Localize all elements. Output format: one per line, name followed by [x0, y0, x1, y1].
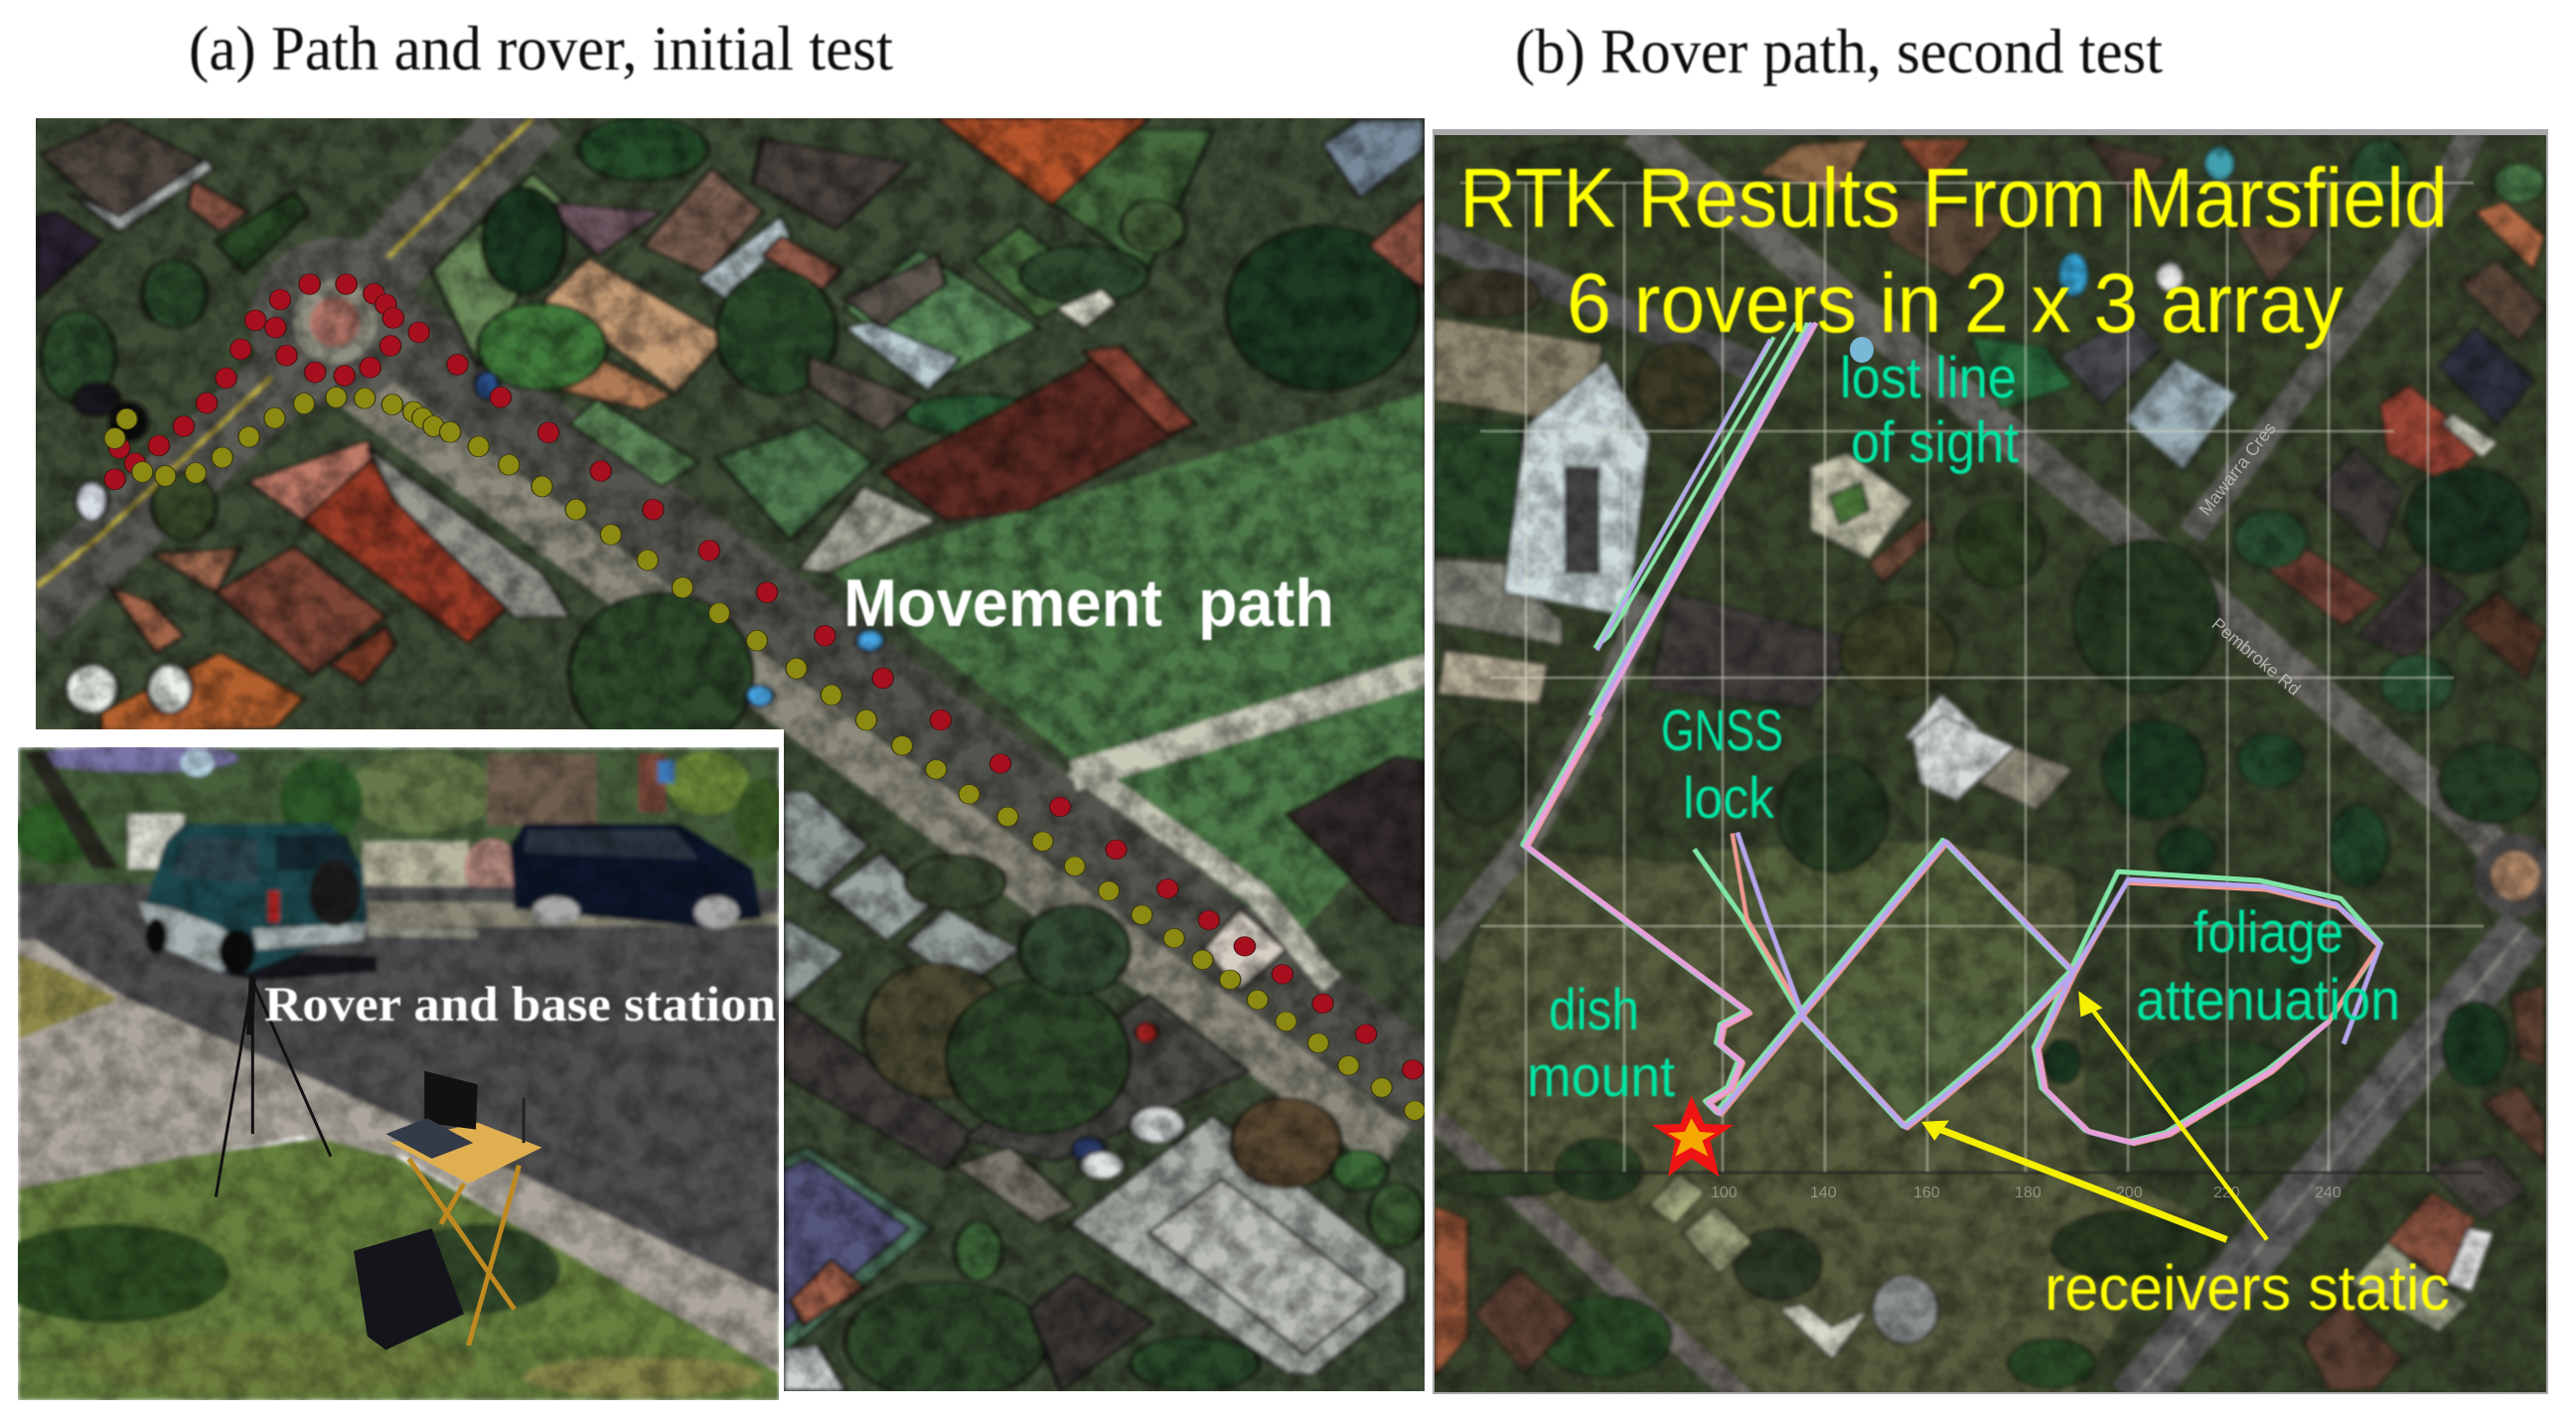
map axis and street labels: 220 — [2213, 1184, 2240, 1201]
rover tracks, lower section — [1523, 714, 2381, 1144]
title: panel a: (a) Path and rover, initial test — [189, 14, 893, 83]
label: movement path: Movement path — [843, 565, 1334, 641]
panel: RTK results aerial map — [1433, 129, 2557, 1401]
annotation: dish mount: mount — [1527, 1044, 1675, 1109]
annotation: foliage attenuation: foliage — [2194, 900, 2344, 965]
map axis and street labels: Mawarra Cres — [2195, 418, 2280, 519]
red and yellow rover path dots, second section — [891, 736, 1426, 1120]
arrow: receivers static to first point — [1921, 1121, 2226, 1240]
heading: 6 rovers: 6 rovers in 2 x 3 array — [1567, 256, 2344, 350]
panel: photo inset of rover and base station — [0, 729, 790, 1401]
map axis and street labels: Pembroke Rd — [2207, 614, 2305, 700]
annotation: foliage attenuation: attenuation — [2136, 968, 2400, 1032]
map axis and street labels: 200 — [2116, 1184, 2143, 1201]
annotation: dish mount — [1527, 978, 1675, 1109]
title: panel b: (b) Rover path, second test — [1515, 17, 2163, 86]
annotation: lost line of sight — [1840, 346, 2019, 475]
annotation: lost line of sight: lost line — [1840, 346, 2017, 410]
map axis and street labels: 140 — [1810, 1184, 1837, 1201]
annotation: dish mount: dish — [1549, 978, 1639, 1042]
map axis and street labels: 180 — [2015, 1184, 2042, 1201]
label: rover and base station: Rover and base station — [264, 976, 776, 1031]
icon: dish mount star — [1652, 1096, 1734, 1177]
tripod — [216, 977, 331, 1196]
annotation: GNSS lock: lock — [1683, 766, 1775, 831]
map axis and street labels: 240 — [2315, 1184, 2342, 1201]
folding table, laptop and bag — [354, 1071, 542, 1349]
icon: map pin — [1850, 337, 1874, 363]
map axis and street labels: 100 — [1711, 1184, 1738, 1201]
heading: RTK results: RTK Results From Marsfield — [1459, 151, 2448, 244]
annotation: lost line of sight: of sight — [1851, 410, 2019, 475]
red and yellow rover path dots, first section — [104, 274, 952, 730]
annotation: GNSS lock: GNSS — [1661, 699, 1783, 763]
rover tracks, upper section — [1590, 323, 1816, 715]
panel: aerial map of movement path — [30, 109, 1440, 1399]
map axis and street labels: 160 — [1913, 1184, 1940, 1201]
map grid — [1460, 183, 2484, 1173]
annotation: receivers static: receivers static — [2045, 1252, 2450, 1324]
annotation: foliage attenuation — [2136, 900, 2400, 1032]
annotation: GNSS lock — [1661, 699, 1783, 831]
arrow: receivers static to second point — [2078, 991, 2267, 1240]
map axis and street labels — [1711, 418, 2342, 1201]
